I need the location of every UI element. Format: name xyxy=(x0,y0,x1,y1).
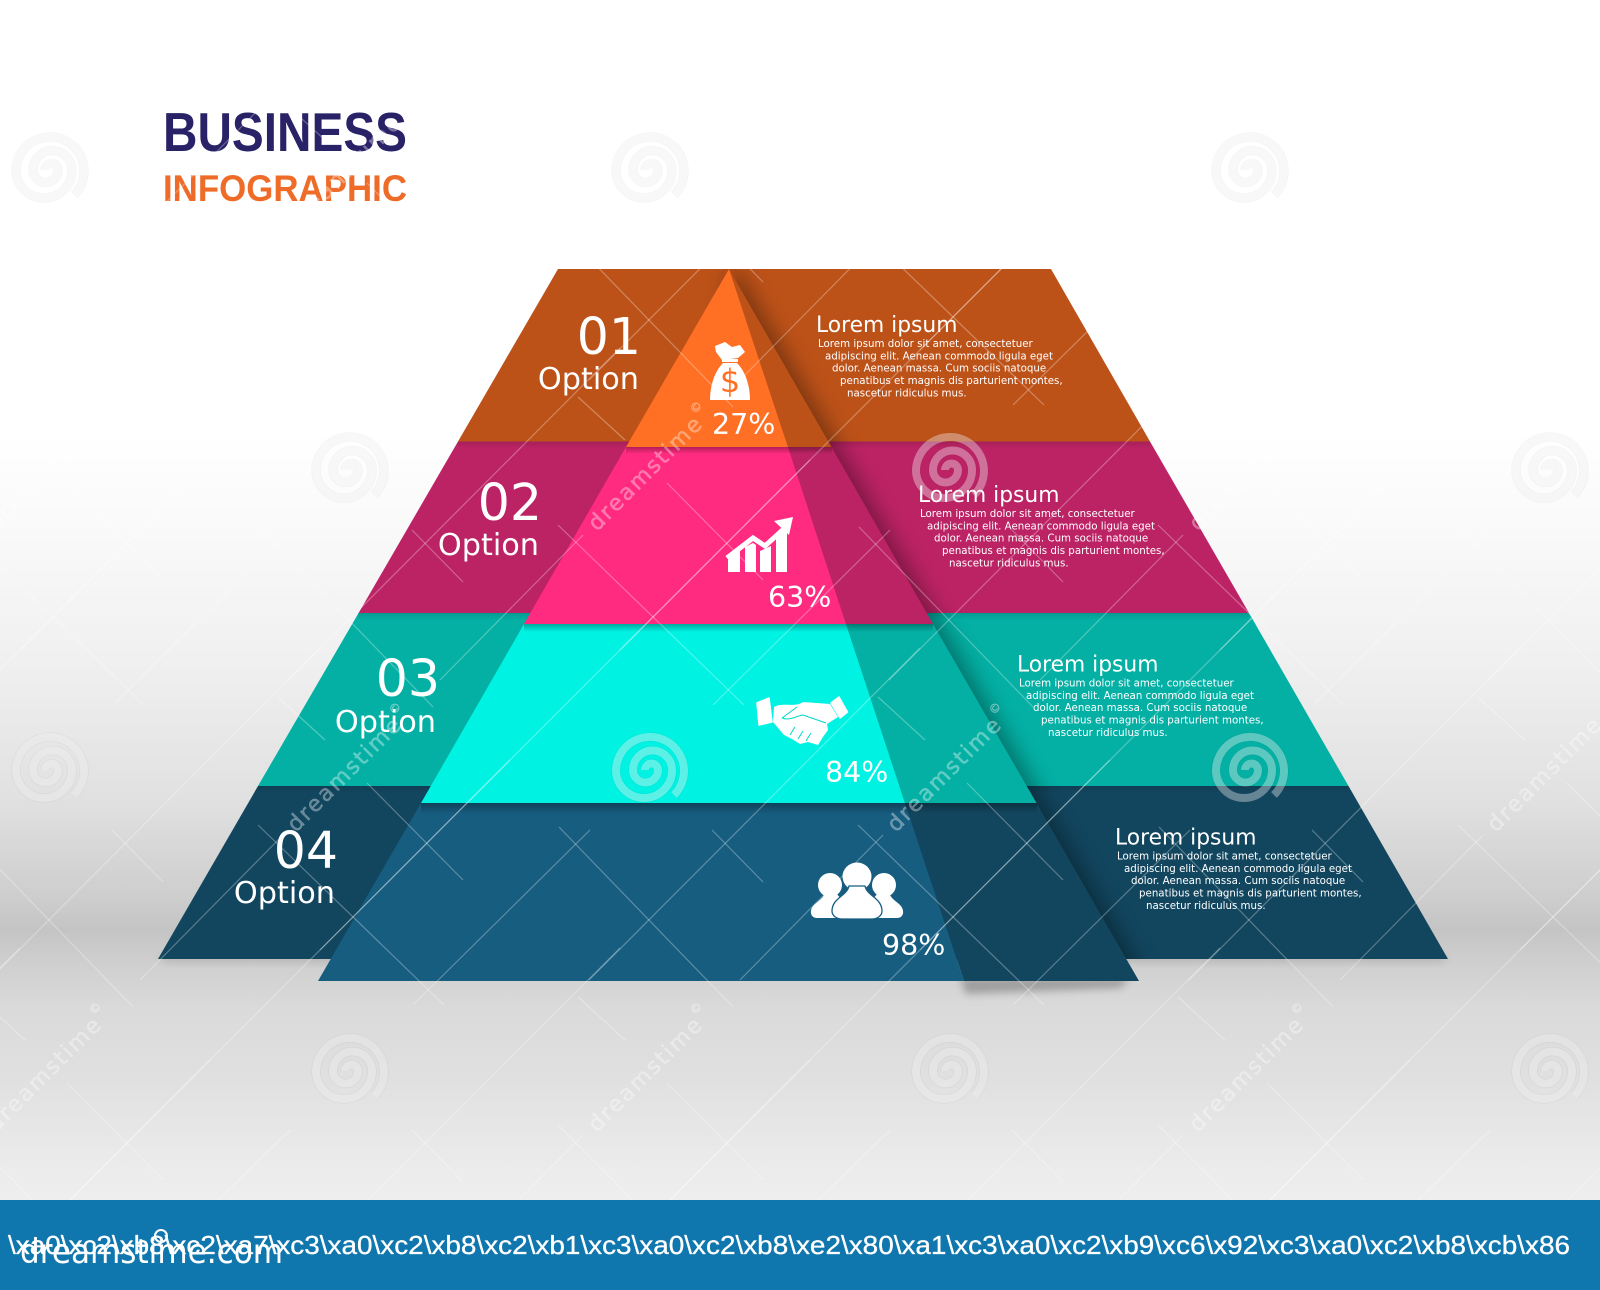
text block 02: nascetur ridiculus mus. xyxy=(949,557,1069,569)
text block 04: penatibus et magnis dis parturient montes, xyxy=(1139,888,1362,900)
text block 03: nascetur ridiculus mus. xyxy=(1048,727,1168,739)
option labels: 04 xyxy=(274,821,338,880)
text block 04: Lorem ipsum xyxy=(1115,826,1256,850)
text block 01: penatibus et magnis dis parturient montes, xyxy=(840,375,1063,387)
text block 04 xyxy=(1115,826,1362,912)
watermark text: © xyxy=(687,397,707,417)
text block 01 xyxy=(816,313,1063,399)
watermark text: © xyxy=(86,998,106,1018)
text block 03: dolor. Aenean massa. Cum sociis natoque xyxy=(1033,702,1247,714)
watermark text: dreamstime xyxy=(1185,1012,1310,1137)
text block 02: Lorem ipsum dolor sit amet, consectetuer xyxy=(920,508,1136,520)
watermark text: © xyxy=(1288,998,1308,1018)
percentages: 84% xyxy=(825,756,888,789)
text block 01: nascetur ridiculus mus. xyxy=(847,387,967,399)
icon: growth chart xyxy=(727,517,793,572)
text block 04: adipiscing elit. Aenean commodo ligula eget xyxy=(1124,863,1352,875)
text block 01: dolor. Aenean massa. Cum sociis natoque xyxy=(832,363,1046,375)
text block 01: Lorem ipsum dolor sit amet, consectetuer xyxy=(818,338,1034,350)
footer band: \xa0\xc2\xb8\xc2\xa7\xc3\xa0\xc2\xb8\xc2\xb1\xc3\xa0\xc2\xb8\xe2\x80\xa1\xc3\xa0\xc2\xb9\xc6\x92\xc3\xa0\xc2\xb8\xcb\x86 xyxy=(8,1230,1570,1260)
percentages: 63% xyxy=(768,581,831,614)
text block 01: Lorem ipsum xyxy=(816,313,957,338)
text block 01: adipiscing elit. Aenean commodo ligula eget xyxy=(825,350,1053,362)
back pyramid bands xyxy=(158,269,1448,959)
icon: handshake xyxy=(757,697,848,745)
option labels: 03 xyxy=(376,649,440,708)
text block 03: Lorem ipsum xyxy=(1017,652,1158,678)
title: INFOGRAPHIC xyxy=(163,168,407,209)
text block 03: Lorem ipsum dolor sit amet, consectetuer xyxy=(1019,678,1235,690)
text block 03: penatibus et magnis dis parturient montes, xyxy=(1041,714,1264,726)
watermark text: © xyxy=(986,698,1006,718)
watermark text: © xyxy=(1288,397,1308,417)
watermark text: dreamstime xyxy=(883,712,1008,837)
front pyramid dark side faces xyxy=(729,269,1139,981)
option labels: Option xyxy=(438,528,539,563)
option labels: Option xyxy=(335,705,436,740)
option labels: Option xyxy=(234,876,335,911)
watermark text: dreamstime xyxy=(1185,411,1310,536)
icon: people xyxy=(811,862,903,919)
text block 04: Lorem ipsum dolor sit amet, consectetuer xyxy=(1117,850,1333,862)
front pyramid light faces xyxy=(318,269,964,981)
text block 02: Lorem ipsum xyxy=(918,483,1059,508)
title: BUSINESS xyxy=(163,101,407,163)
option labels: 02 xyxy=(478,473,542,532)
text block 02 xyxy=(918,483,1165,569)
back band top shadows xyxy=(258,442,1348,793)
watermark text: © xyxy=(687,998,707,1018)
front band shadows xyxy=(421,447,1037,814)
text block 02: penatibus et magnis dis parturient montes, xyxy=(942,545,1165,557)
percentages: 98% xyxy=(882,929,945,962)
footer band: dreamstime.com xyxy=(20,1232,283,1272)
pyramid edge shadow xyxy=(700,269,1147,981)
watermark text: dreamstime xyxy=(584,411,709,536)
watermark text: © xyxy=(386,698,406,718)
text block 03 xyxy=(1017,652,1264,739)
percentages xyxy=(712,408,945,962)
text block 02: adipiscing elit. Aenean commodo ligula eget xyxy=(927,520,1155,532)
watermark text: © xyxy=(86,397,106,417)
watermark text: dreamstime xyxy=(883,110,1008,235)
percentages: 27% xyxy=(712,408,775,441)
icon: money bag: $ xyxy=(720,362,740,400)
option labels: 01 xyxy=(577,307,641,366)
icon: money bag xyxy=(710,342,750,400)
text block 03: adipiscing elit. Aenean commodo ligula eget xyxy=(1026,690,1254,702)
title xyxy=(163,101,407,209)
watermark text: dreamstime xyxy=(283,110,408,235)
option labels xyxy=(234,307,641,911)
watermark text: © xyxy=(386,96,406,116)
text block 04: dolor. Aenean massa. Cum sociis natoque xyxy=(1131,875,1345,887)
text block 02: dolor. Aenean massa. Cum sociis natoque xyxy=(934,533,1148,545)
watermark spirals xyxy=(16,137,1584,1099)
text block 04: nascetur ridiculus mus. xyxy=(1146,900,1266,912)
watermark text: © xyxy=(986,96,1006,116)
watermark text: dreamstime xyxy=(283,712,408,837)
option labels: Option xyxy=(538,362,639,397)
footer band xyxy=(0,1200,1600,1290)
floor shadow xyxy=(158,957,1448,994)
watermark text: dreamstime xyxy=(584,1012,709,1137)
